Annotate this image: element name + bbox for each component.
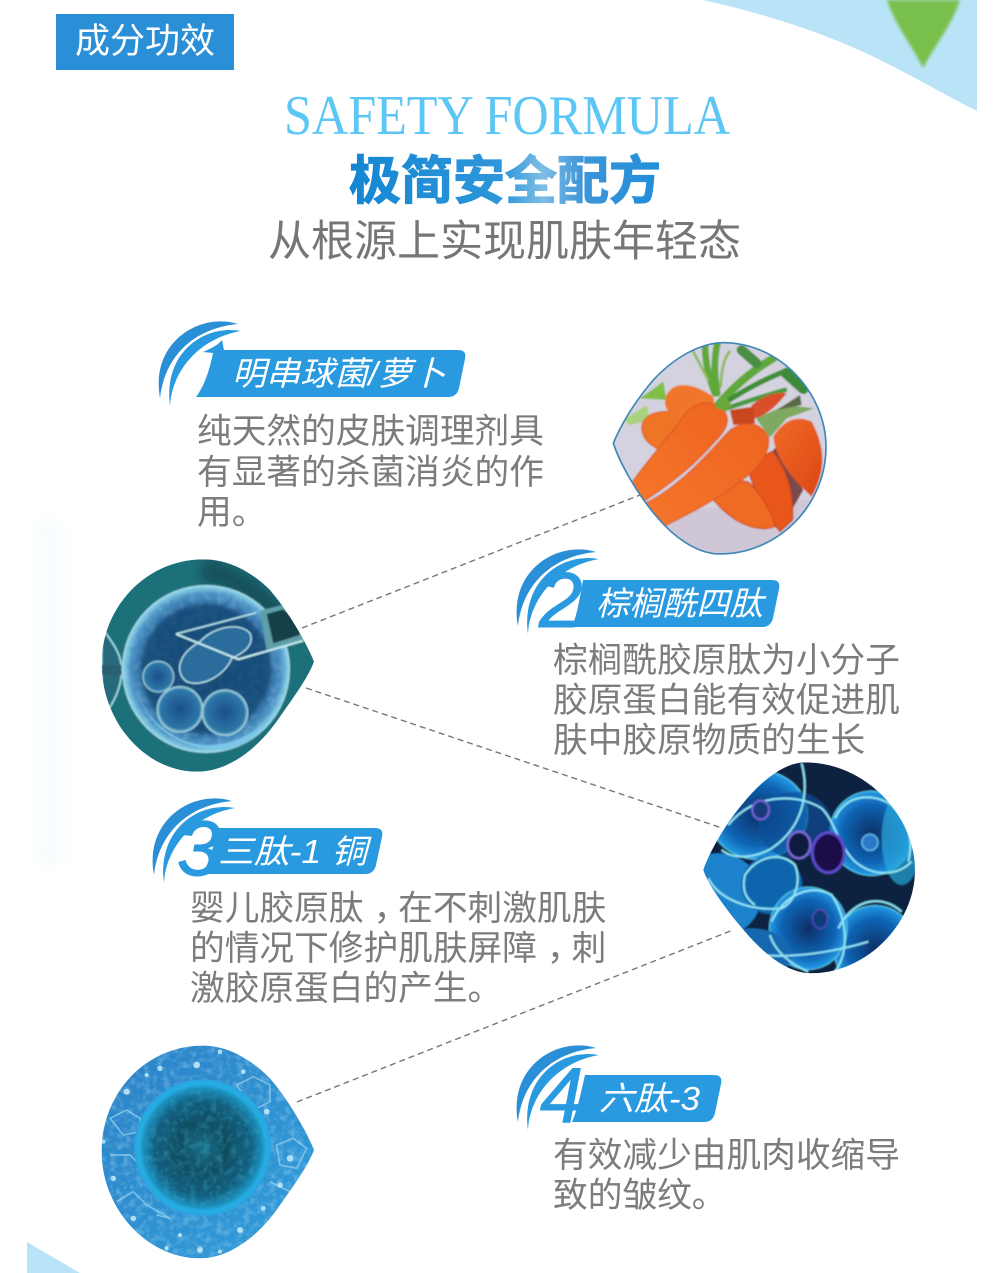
title block: SAFETY FORMULA [284, 85, 731, 147]
cell image 4 [102, 1046, 314, 1258]
item 2 heading [517, 549, 779, 644]
item 3 description: 的情况下修护肌肤屏障 ，刺 [190, 929, 606, 968]
section tag: 成分功效 [75, 22, 215, 61]
item 3 description [190, 889, 606, 1008]
item 2 heading: 棕榈酰四肽 [596, 585, 767, 622]
item 2 description: 棕榈酰胶原肽为小分子 [553, 641, 900, 680]
item 2 description [553, 641, 900, 760]
title block: 极简安全配方 [349, 153, 661, 211]
item 1 description [197, 412, 544, 532]
corner decoration: top right [703, 0, 977, 111]
faint background glows [28, 520, 72, 865]
item 1 description: 用。 [197, 494, 266, 532]
dashed connector: cell 1 to cell 3 [306, 688, 722, 828]
title block: 从根源上实现肌肤年轻态 [268, 218, 741, 266]
item 1 description: 纯天然的皮肤调理剂具 [197, 412, 544, 451]
item 1 description: 有显著的杀菌消炎的作 [197, 453, 544, 492]
item 3 heading: 三肽-1 铜 [218, 833, 372, 870]
item 1 heading [159, 321, 465, 406]
carrot image [612, 342, 827, 555]
item 3 heading [153, 798, 382, 892]
item 2 heading: 2 [538, 556, 582, 644]
dashed connector: cell 4 to cell 3 [297, 930, 733, 1102]
item 4 heading: 4 [540, 1051, 583, 1139]
item 2 description: 肤中胶原物质的生长 [553, 721, 865, 760]
dashed connector: cell 1 to carrot [302, 495, 640, 628]
item 4 description [553, 1136, 900, 1215]
title block [268, 85, 741, 266]
item 4 heading: 六肽-3 [599, 1080, 701, 1117]
item 2 description: 胶原蛋白能有效促进肌 [553, 681, 900, 720]
item 3 heading: 3 [177, 804, 220, 892]
item 1 heading: 明串球菌/萝卜 [232, 355, 446, 392]
cell image 1 [102, 559, 314, 772]
cell image 3 [703, 762, 915, 974]
item 4 description: 致的皱纹。 [553, 1176, 726, 1215]
item 3 description: 激胶原蛋白的产生。 [190, 969, 502, 1008]
item 3 description: 婴儿胶原肽 ，在不刺激肌肤 [190, 889, 606, 928]
item 4 heading [517, 1045, 721, 1139]
corner decoration: bottom left [27, 1242, 80, 1273]
section tag [56, 14, 234, 70]
item 4 description: 有效减少由肌肉收缩导 [553, 1136, 900, 1175]
